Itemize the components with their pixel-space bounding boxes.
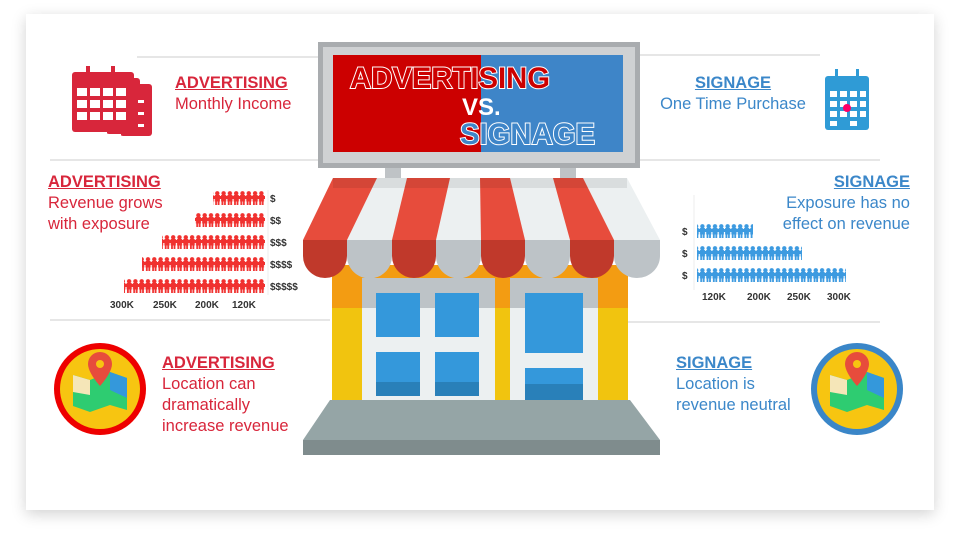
chart: advertising bars: $$$$$: [270, 282, 298, 293]
chart: advertising bars: 300K: [110, 300, 135, 311]
chart: advertising bars: $: [270, 194, 276, 205]
text: advertising monthly: Monthly Income: [175, 95, 291, 113]
text: advertising exposure: [48, 173, 163, 233]
chart: signage bars: $: [682, 271, 688, 282]
text: advertising monthly: ADVERTISING: [175, 74, 288, 92]
text: signage one time: [660, 74, 806, 113]
text: advertising location: dramatically: [162, 396, 250, 414]
text: signage one time: SIGNAGE: [695, 74, 771, 92]
text: signage exposure: effect on revenue: [783, 215, 910, 233]
chart: advertising bars: 120K: [232, 300, 257, 311]
chart: advertising bars: $$$: [270, 238, 287, 249]
chart: signage bars: [682, 195, 852, 303]
text: advertising exposure: Revenue grows: [48, 194, 163, 212]
chart: signage bars: $: [682, 249, 688, 260]
text: advertising exposure: ADVERTISING: [48, 173, 161, 191]
text: advertising location: increase revenue: [162, 417, 289, 435]
text: signage exposure: Exposure has no: [786, 194, 910, 212]
store illustration: [303, 42, 660, 455]
base: [303, 400, 660, 440]
sign: [318, 42, 640, 168]
awning: [303, 178, 660, 278]
icon: red calendars: [72, 66, 152, 136]
icon: map blue: [811, 343, 903, 435]
text: advertising exposure: with exposure: [48, 215, 150, 233]
chart: signage bars: 250K: [787, 292, 812, 303]
chart: signage bars: 120K: [702, 292, 727, 303]
building: [332, 265, 628, 310]
chart: advertising bars: 200K: [195, 300, 220, 311]
text: signage location: revenue neutral: [676, 396, 791, 414]
sign: VS.: [462, 94, 501, 121]
text: advertising monthly: [175, 74, 291, 113]
chart: advertising bars: $$$$: [270, 260, 293, 271]
text: signage location: [676, 354, 791, 414]
text: advertising location: ADVERTISING: [162, 354, 275, 372]
text: signage exposure: SIGNAGE: [834, 173, 910, 191]
chart: signage bars: 300K: [827, 292, 852, 303]
chart: advertising bars: $$: [270, 216, 282, 227]
text: signage location: SIGNAGE: [676, 354, 752, 372]
chart: advertising bars: [110, 190, 298, 311]
text: signage exposure: [783, 173, 910, 233]
text: signage location: Location is: [676, 375, 755, 393]
sign: SIGNAGE: [460, 118, 595, 151]
text: signage one time: One Time Purchase: [660, 95, 806, 113]
text: advertising location: Location can: [162, 375, 256, 393]
chart: signage bars: $: [682, 227, 688, 238]
text: advertising location: [162, 354, 289, 435]
icon: blue calendar: [825, 69, 869, 130]
sign: ADVERTISING: [350, 62, 550, 95]
chart: advertising bars: 250K: [153, 300, 178, 311]
chart: signage bars: 200K: [747, 292, 772, 303]
icon: map red: [54, 343, 146, 435]
